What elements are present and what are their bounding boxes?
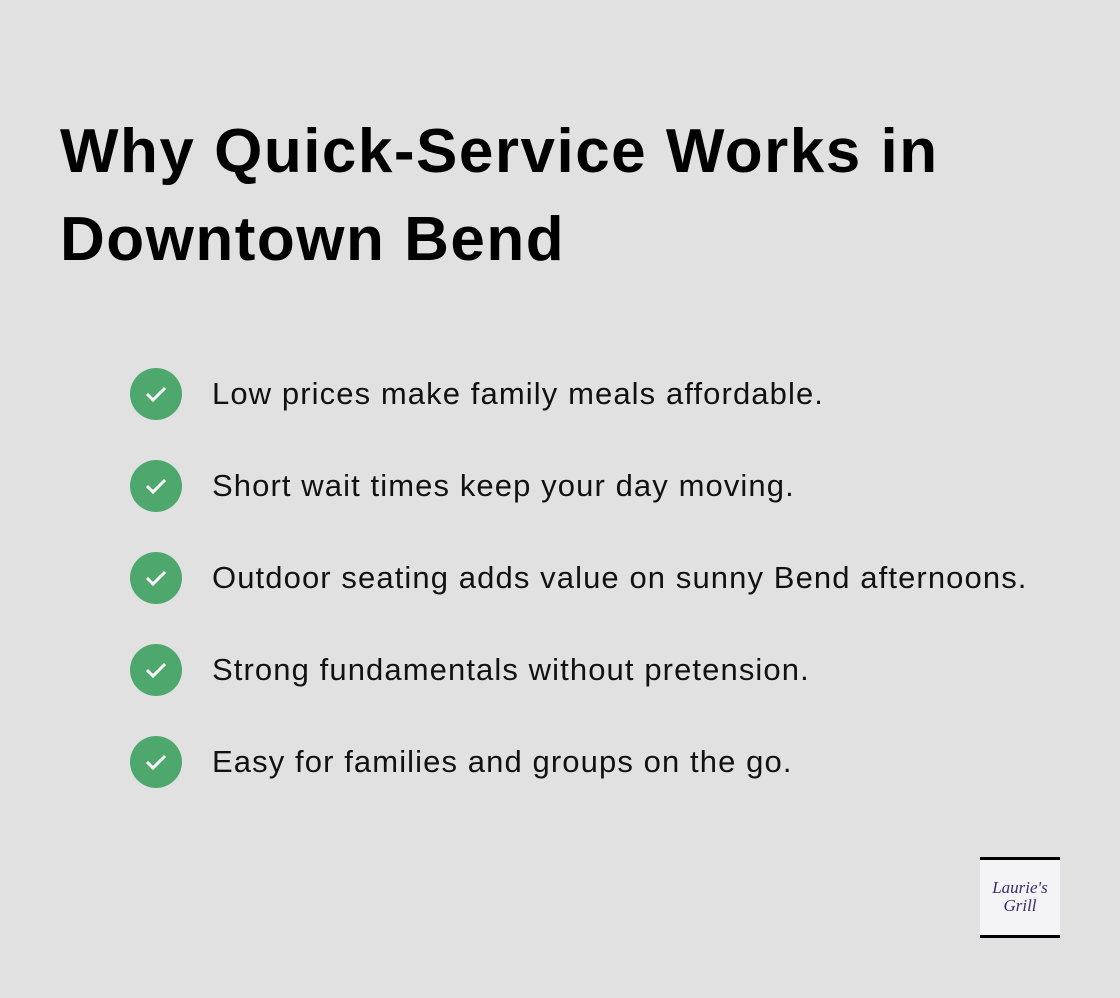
list item 1	[130, 368, 824, 420]
title	[60, 117, 939, 274]
icon: check	[130, 552, 182, 604]
list item 1: Low prices make family meals affordable.	[212, 376, 824, 411]
list item 5	[130, 736, 793, 788]
logo: Laurie's	[992, 878, 1048, 897]
logo: Grill	[1003, 896, 1037, 915]
list item 4	[130, 644, 810, 696]
icon: check	[130, 368, 182, 420]
list item 4: Strong fundamentals without pretension.	[212, 652, 810, 687]
list item 2: Short wait times keep your day moving.	[212, 468, 795, 503]
logo	[980, 857, 1060, 938]
list item 3	[130, 552, 1028, 604]
list item 3: Outdoor seating adds value on sunny Bend afternoons.	[212, 560, 1028, 595]
title: Why Quick-Service Works in	[60, 117, 939, 186]
list item 2	[130, 460, 795, 512]
title: Downtown Bend	[60, 205, 565, 274]
icon: check	[130, 460, 182, 512]
icon: check	[130, 736, 182, 788]
list item 5: Easy for families and groups on the go.	[212, 744, 793, 779]
icon: check	[130, 644, 182, 696]
